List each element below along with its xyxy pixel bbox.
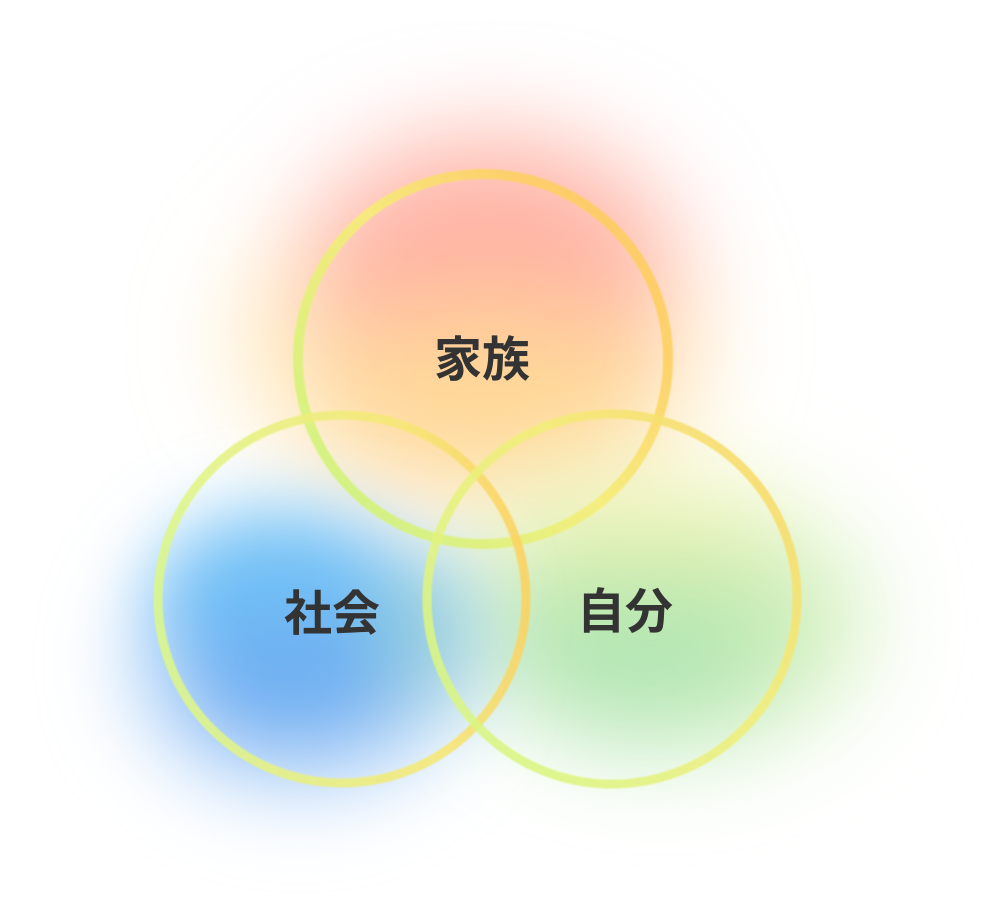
circle: family (298, 174, 668, 544)
glow: family red (235, 135, 705, 500)
label: family: 家族 (434, 334, 530, 387)
circle: self (427, 414, 797, 784)
glow: society blue (120, 510, 485, 805)
label: society: 社会 (284, 588, 380, 641)
label: self: 自分 (577, 586, 673, 639)
circle: society (158, 415, 526, 783)
glow: self green (465, 475, 865, 750)
